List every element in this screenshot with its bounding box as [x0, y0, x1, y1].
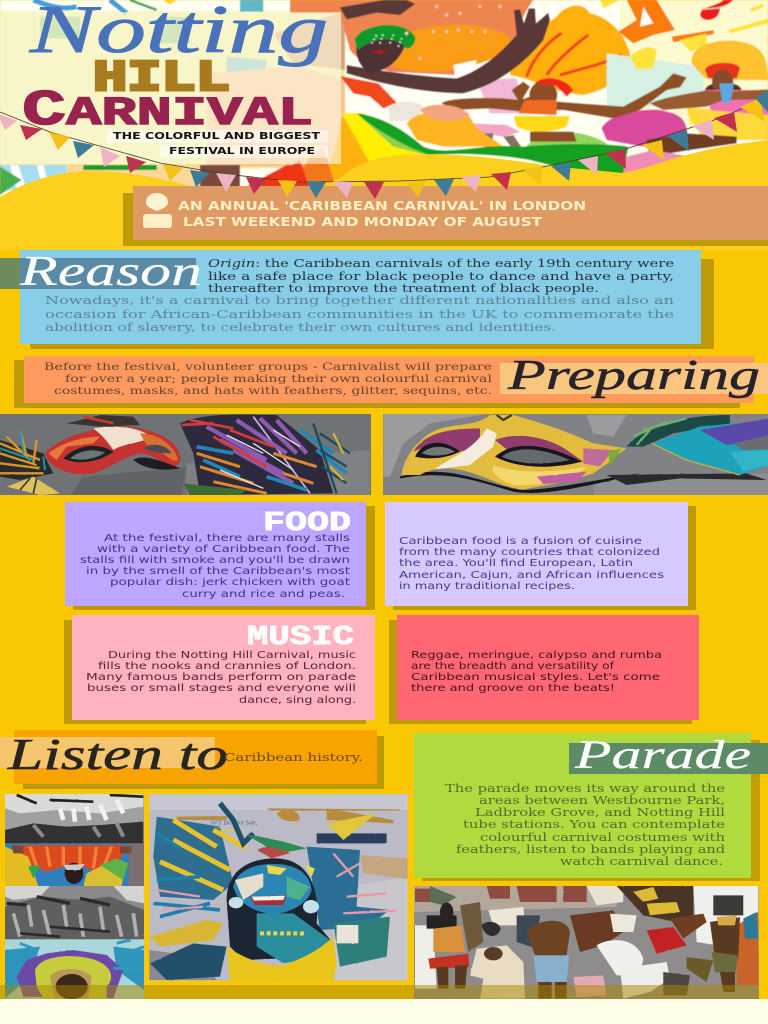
parade text: areas between Westbourne Park, — [479, 794, 725, 807]
caribbean food text: American, Cajun, and African influences — [399, 570, 664, 581]
music text: During the Notting Hill Carnival, music — [108, 650, 356, 661]
bottom translucent band — [0, 985, 759, 999]
origin text — [208, 257, 674, 295]
parade text: colourful carnival costumes with — [480, 831, 725, 844]
parade text: watch carnival dance. — [560, 855, 723, 868]
panel: food intro — [65, 502, 375, 610]
icon: location pin — [146, 193, 168, 211]
panel: preparing — [14, 353, 768, 408]
musical styles text: are the breadth and versatility of — [411, 661, 615, 672]
musical styles text: Reggae, meringue, calypso and rumba — [411, 650, 662, 661]
food text: curry and rice and peas. — [182, 589, 345, 600]
subtitle — [107, 130, 328, 158]
yellow wave — [0, 140, 768, 250]
musical styles text: there and groove on the beats! — [411, 683, 615, 694]
title: Hill: HILL — [93, 54, 230, 104]
heading: Preparing: Preparing — [507, 353, 760, 399]
origin text: thereafter to improve the treatment of black people. — [208, 282, 599, 295]
parade text: tube stations. You can contemplate — [463, 818, 725, 831]
parade text: The parade moves its way around the — [445, 782, 725, 795]
heading: Reason: Reason — [19, 249, 202, 295]
heading: Parade: Parade — [574, 732, 751, 777]
nowadays text: occasion for African-Caribbean communities in the UK to commemorate the — [45, 307, 674, 321]
heading: Listen to: Listen to — [7, 730, 228, 779]
image: parade crowd painting — [414, 886, 759, 999]
food text: with a variety of Caribbean food. The — [97, 544, 350, 555]
heading: Music: MUSIC — [247, 623, 354, 653]
image: painted red mask and feathers — [0, 414, 371, 495]
musical styles text: Caribbean musical styles. Let's come — [411, 672, 660, 683]
panel: caribbean food — [385, 502, 696, 610]
pale title panel — [0, 12, 341, 164]
music text: dance, sing along. — [239, 695, 356, 706]
bunting — [0, 90, 768, 199]
music text: fills the nooks and crannies of London. — [98, 661, 356, 672]
caribbean food text — [399, 536, 664, 592]
parade text: feathers, listen to bands playing and — [456, 843, 725, 856]
food text: At the festival, there are many stalls — [104, 533, 350, 544]
heading: Food: FOOD — [263, 509, 351, 539]
panel: reason — [0, 249, 714, 349]
image: painted gold mask and blue mask — [383, 414, 768, 495]
caribbean food text: from the many countries that colonized — [399, 547, 660, 558]
panel: listen to — [0, 730, 384, 789]
preparing text — [44, 361, 493, 397]
subtitle: THE COLORFUL AND BIGGEST — [113, 131, 321, 142]
date text: LAST WEEKEND AND MONDAY OF AUGUST — [183, 215, 543, 229]
title: Carnival: C ARNIVAL — [22, 83, 313, 140]
music text: buses or small stages and everyone will — [87, 683, 356, 694]
food text: stalls fill with smoke and you'll be drawn — [80, 555, 350, 566]
origin text: like a safe place for black people to dance and have a party, — [208, 270, 674, 283]
origin text: Origin : the Caribbean carnivals of the early 19th century were — [208, 257, 674, 270]
music text — [86, 650, 356, 706]
listen text: Caribbean history. — [224, 751, 363, 764]
food text — [80, 533, 350, 600]
caribbean food text: Caribbean food is a fusion of cuisine — [399, 536, 642, 547]
panel: parade — [414, 732, 768, 881]
icon: calendar — [143, 214, 172, 228]
place text: AN ANNUAL 'CARIBBEAN CARNIVAL' IN LONDON — [178, 199, 586, 213]
musical styles text — [411, 650, 662, 694]
image: portrait painting with feathers: NFT Drop for Sale, — [211, 820, 258, 827]
photo collage: four carnival pictures — [5, 794, 144, 999]
parade text: Ladbroke Grove, and Notting Hill — [475, 806, 726, 819]
nowadays text: Nowadays, it's a carnival to bring together different nationalities and also an — [45, 293, 675, 307]
panel: music intro — [64, 615, 375, 724]
preparing text: costumes, masks, and hats with feathers, glitter, sequins, etc. — [54, 385, 492, 397]
bottom strip — [0, 999, 768, 1024]
image: portrait painting with feathers — [149, 794, 408, 981]
caribbean food text: the area. You'll find European, Latin — [399, 558, 633, 569]
food text: popular dish: jerk chicken with goat — [110, 577, 350, 588]
header illustration: carnival dancers — [0, 0, 768, 205]
panel: date and place — [123, 186, 768, 246]
nowadays text — [45, 293, 675, 334]
subtitle: FESTIVAL IN EUROPE — [169, 146, 315, 157]
panel: musical styles — [389, 615, 699, 724]
food text: in by the smell of the Caribbean's most — [86, 566, 350, 577]
preparing text: for over a year; people making their own colourful carnival — [65, 373, 493, 385]
parade text — [445, 782, 726, 868]
preparing text: Before the festival, volunteer groups - Carnivalist will prepare — [44, 361, 492, 373]
nowadays text: abolition of slavery, to celebrate their own cultures and identities. — [45, 320, 556, 334]
title — [22, 0, 328, 140]
music text: Many famous bands perform on parade — [86, 672, 356, 683]
caribbean food text: in many traditional recipes. — [399, 581, 575, 592]
